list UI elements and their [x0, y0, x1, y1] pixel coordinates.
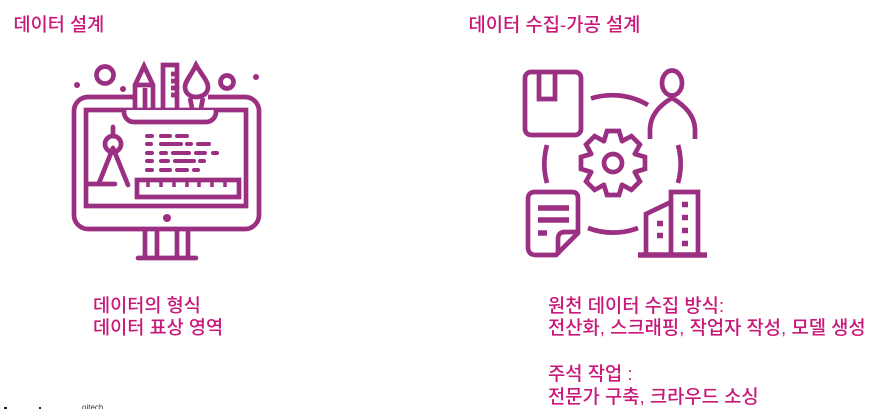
icon: paintbrush: [185, 65, 208, 108]
icon: data cycle: [525, 70, 707, 255]
text block: source data collection methods: [548, 295, 866, 338]
ruler on screen: [137, 180, 239, 197]
heading: data collection and processing design: 데이터 수집-가공 설계: [468, 14, 640, 35]
icon: document: [528, 192, 578, 255]
icon: pencil: [135, 66, 153, 108]
icon: person: [650, 70, 695, 139]
icon: box: [525, 72, 581, 135]
heading: data design: 데이터 설계: [14, 14, 104, 35]
icon: compass: [87, 127, 128, 185]
text block: source data collection methods: 전산화, 스크래핑, 작업자 작성, 모델 생성: [548, 317, 866, 338]
text block: data design notes: [93, 295, 223, 338]
icon: buildings: [638, 192, 707, 255]
icon: design monitor: [74, 65, 259, 258]
text lines on screen: [147, 136, 217, 170]
decorative circles and dots: [74, 66, 259, 92]
text block: data design notes: 데이터의 형식: [93, 295, 201, 316]
cycle arcs: [544, 95, 681, 233]
text block: data design notes: 데이터 표상 영역: [93, 317, 223, 338]
icon: gear: [581, 131, 645, 195]
text block: source data collection methods: 원천 데이터 수집 방식:: [548, 295, 724, 316]
text block: annotation work: [548, 363, 759, 407]
clipped footer marks: [4, 407, 41, 409]
icon: ruler: [163, 65, 177, 108]
text block: annotation work: 전문가 구축, 크라우드 소싱: [548, 386, 759, 407]
text block: annotation work: 주석 작업 :: [548, 363, 633, 384]
